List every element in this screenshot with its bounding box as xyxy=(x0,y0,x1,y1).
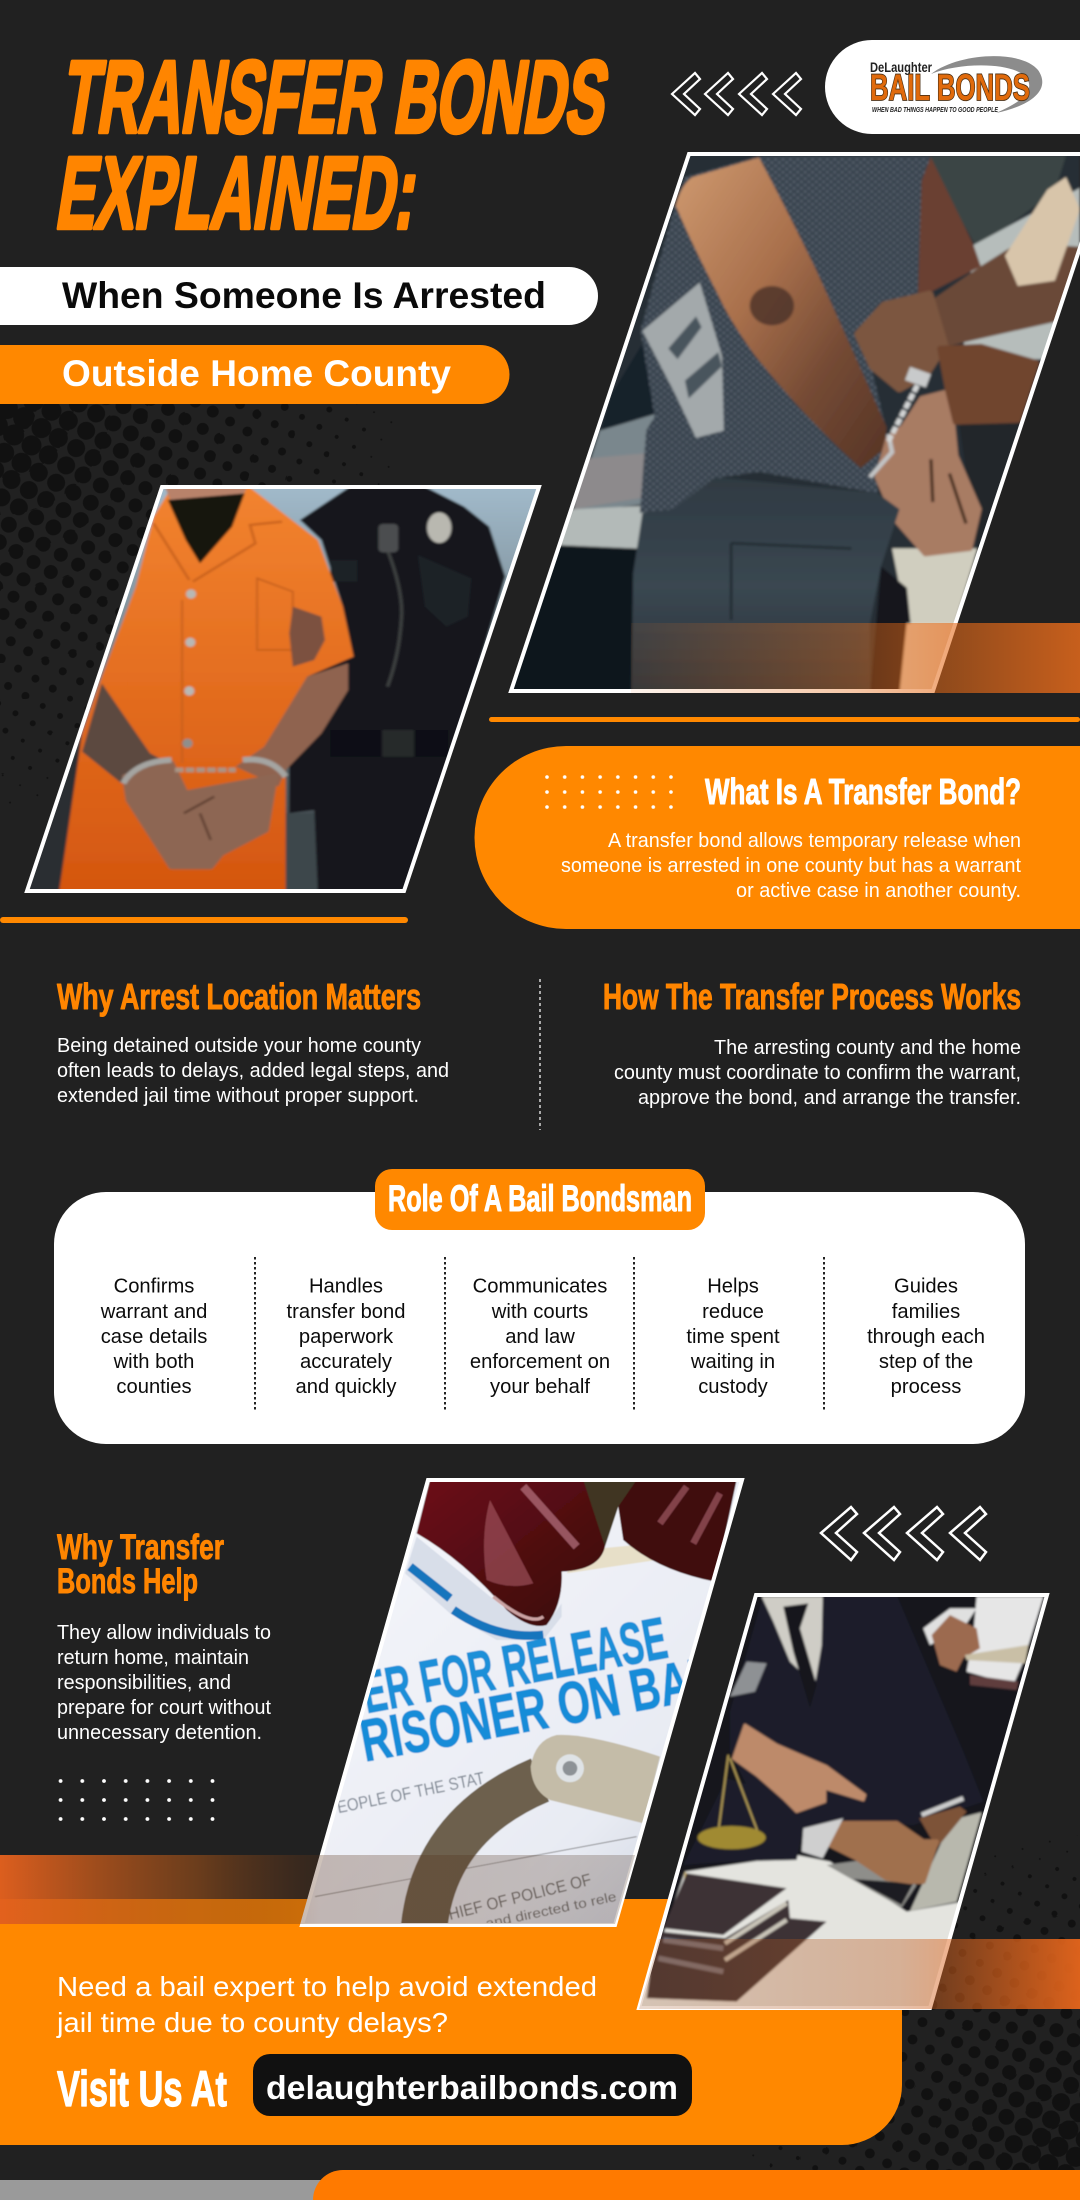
footer bars xyxy=(0,2170,1080,2200)
panel: what is a transfer bond: someone is arrested in one county but has a warrant xyxy=(561,854,1021,877)
photo: gavel, handcuffs and release order: RISONER ON BAIL xyxy=(355,1641,731,1774)
section: why arrest location matters: often leads to delays, added legal steps, and xyxy=(57,1059,449,1082)
section: why arrest location matters: Being detained outside your home county xyxy=(57,1034,422,1057)
column 4: reduce xyxy=(702,1301,764,1323)
photo: gavel, handcuffs and release order xyxy=(290,1470,760,1940)
column 2: paperwork xyxy=(299,1326,394,1348)
column 4: time spent xyxy=(686,1326,780,1348)
column 2: transfer bond xyxy=(287,1301,405,1323)
panel: what is a transfer bond xyxy=(474,746,1080,929)
title: TRANSFER BONDS xyxy=(57,40,617,154)
column 5: through each xyxy=(867,1326,985,1348)
column 5 xyxy=(867,1276,985,1398)
heading tab xyxy=(375,1169,705,1230)
section: why transfer bonds help xyxy=(57,1528,271,1744)
photo: lawyers at laptop with scales xyxy=(636,1593,1050,2010)
section: how the transfer process works: approve the bond, and arrange the transfer. xyxy=(638,1086,1021,1109)
logo pill: WHEN BAD THINGS HAPPEN TO GOOD PEOPLE xyxy=(872,105,999,114)
column 4: waiting in xyxy=(690,1351,775,1373)
call to action text: Visit Us At xyxy=(57,2061,227,2117)
photo: inmate in orange with officer xyxy=(0,480,560,897)
column 4: Helps xyxy=(707,1276,759,1298)
column 1: case details xyxy=(101,1326,207,1348)
section: why arrest location matters xyxy=(57,976,449,1107)
website pill xyxy=(253,2054,692,2116)
column 1: warrant and xyxy=(100,1301,207,1323)
subtitle pill: white: When Someone Is Arrested xyxy=(62,275,546,316)
column 1: Confirms xyxy=(114,1276,194,1298)
call to action text: Need a bail expert to help avoid extended xyxy=(57,1971,597,2002)
dots xyxy=(50,1772,223,1828)
column 3 xyxy=(470,1276,610,1398)
decorative strip: left xyxy=(0,1855,635,1924)
column 4: custody xyxy=(698,1376,769,1398)
photo: gavel, handcuffs and release order: and directed to rele xyxy=(484,1889,618,1931)
heading tab: Role Of A Bail Bondsman xyxy=(388,1178,692,1219)
section: why transfer bonds help: responsibilities, and xyxy=(57,1671,231,1694)
call to action text xyxy=(56,1971,692,2117)
column 1: counties xyxy=(116,1376,192,1398)
column 2: accurately xyxy=(300,1351,393,1373)
section: why transfer bonds help: Bonds Help xyxy=(57,1562,198,1601)
halftone pattern: lower right xyxy=(745,1835,1080,2170)
section: how the transfer process works: The arresting county and the home xyxy=(714,1036,1021,1059)
divider: orange line right xyxy=(489,717,1080,722)
section: why transfer bonds help: Why Transfer xyxy=(57,1528,224,1567)
column 5: step of the xyxy=(879,1351,973,1373)
logo pill: DeLaughter xyxy=(870,59,932,75)
icon: chevrons lower xyxy=(821,1507,986,1560)
column 3: your behalf xyxy=(490,1376,590,1398)
section: how the transfer process works xyxy=(603,976,1021,1109)
section: why transfer bonds help: return home, maintain xyxy=(57,1646,249,1669)
decorative strip: top xyxy=(631,623,1080,693)
decorative strip: right xyxy=(639,1939,1080,2009)
website pill: delaughterbailbonds.com xyxy=(266,2069,678,2106)
dots xyxy=(538,770,680,814)
logo pill xyxy=(825,40,1080,134)
title: EXPLAINED: xyxy=(51,136,427,250)
column 3: with courts xyxy=(491,1301,588,1323)
photo: handcuffed man xyxy=(500,145,1080,705)
title xyxy=(51,40,617,250)
subtitle pill: orange: Outside Home County xyxy=(62,353,451,394)
column 2: Handles xyxy=(309,1276,383,1298)
column 3: Communicates xyxy=(473,1276,607,1298)
panel: role of a bail bondsman xyxy=(54,1169,1025,1444)
column 1 xyxy=(100,1276,207,1398)
panel: what is a transfer bond: or active case in another county. xyxy=(736,879,1021,902)
column 5: families xyxy=(892,1301,960,1323)
column 5: process xyxy=(891,1376,961,1398)
section: why arrest location matters: extended jail time without proper support. xyxy=(57,1084,419,1107)
subtitle pill: orange xyxy=(0,345,510,404)
column 1: with both xyxy=(113,1351,194,1373)
halftone pattern: upper left xyxy=(0,404,400,804)
column 2 xyxy=(287,1276,405,1398)
column 3: and law xyxy=(505,1326,575,1348)
section: why arrest location matters: Why Arrest Location Matters xyxy=(57,976,421,1017)
divider: orange line left xyxy=(0,917,408,923)
panel: call to action background xyxy=(0,1899,902,2145)
section: why transfer bonds help: unnecessary detention. xyxy=(57,1721,262,1744)
photo: gavel, handcuffs and release order: ER FOR RELEASE xyxy=(357,1604,672,1726)
column 3: enforcement on xyxy=(470,1351,610,1373)
photo: gavel, handcuffs and release order: EOPLE OF THE STAT xyxy=(335,1768,486,1817)
section: why transfer bonds help: prepare for court without xyxy=(57,1696,271,1719)
column 2: and quickly xyxy=(296,1376,397,1398)
photo: gavel, handcuffs and release order: HIEF OF POLICE OF xyxy=(446,1870,593,1924)
column 5: Guides xyxy=(894,1276,958,1298)
icon: chevrons top xyxy=(672,73,801,115)
section: how the transfer process works: county must coordinate to confirm the warrant, xyxy=(614,1061,1021,1084)
section: why transfer bonds help: They allow individuals to xyxy=(57,1621,271,1644)
call to action text: jail time due to county delays? xyxy=(56,2007,448,2038)
panel: what is a transfer bond: A transfer bond allows temporary release when xyxy=(608,829,1021,852)
subtitle pill: white xyxy=(0,267,598,325)
column 4 xyxy=(686,1276,780,1398)
